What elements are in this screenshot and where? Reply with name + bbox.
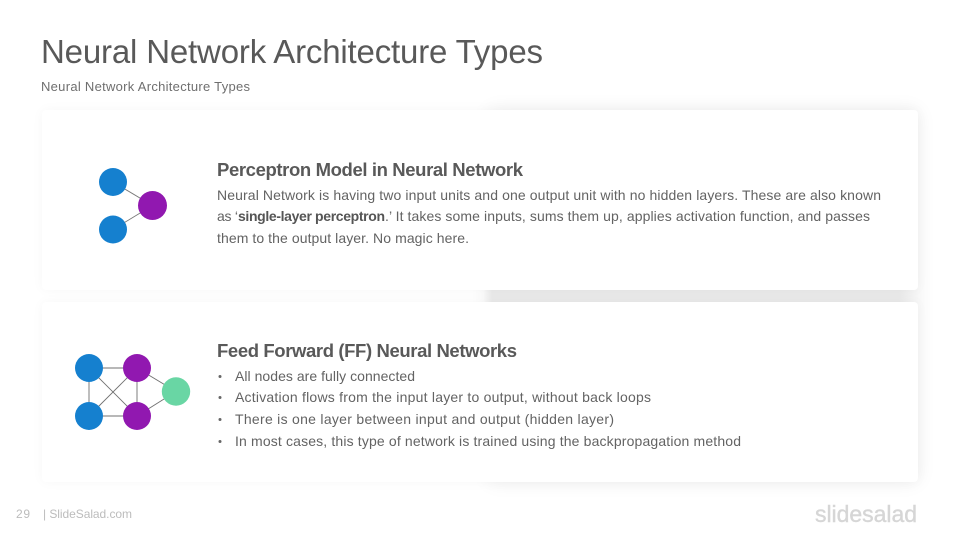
icon: feed forward network diagram (75, 354, 190, 430)
perceptron description: as ‘ (217, 208, 238, 224)
logo: slidesalad: slidesalad (815, 501, 917, 527)
feed forward heading: Feed Forward (FF) Neural Networks (217, 340, 517, 361)
feed forward bullet list: In most cases, this type of network is trained using the backpropagation method (235, 433, 741, 449)
feed forward bullet list: There is one layer between input and output (hidden layer) (235, 411, 614, 427)
feed forward bullet list (218, 368, 741, 449)
perceptron heading: Perceptron Model in Neural Network (217, 159, 524, 180)
panel: perceptron model (42, 110, 918, 290)
icon: perceptron diagram (99, 168, 167, 244)
footer page number: 29 (16, 507, 30, 521)
footer site name: | SlideSalad.com (43, 507, 132, 521)
perceptron description: them to the output layer. No magic here. (217, 230, 469, 246)
perceptron description (217, 187, 881, 246)
panel: feed forward network (42, 302, 918, 482)
perceptron description: .’ It takes some inputs, sums them up, applies activation function, and passes (385, 208, 870, 224)
perceptron description: Neural Network is having two input units and one output unit with no hidden layers. These are also known (217, 187, 881, 203)
title: Neural Network Architecture Types (41, 33, 543, 70)
perceptron description: single-layer perceptron (238, 208, 385, 224)
subtitle: Neural Network Architecture Types (41, 79, 250, 94)
feed forward bullet list: All nodes are fully connected (235, 368, 415, 384)
feed forward bullet list: Activation flows from the input layer to output, without back loops (235, 389, 651, 405)
